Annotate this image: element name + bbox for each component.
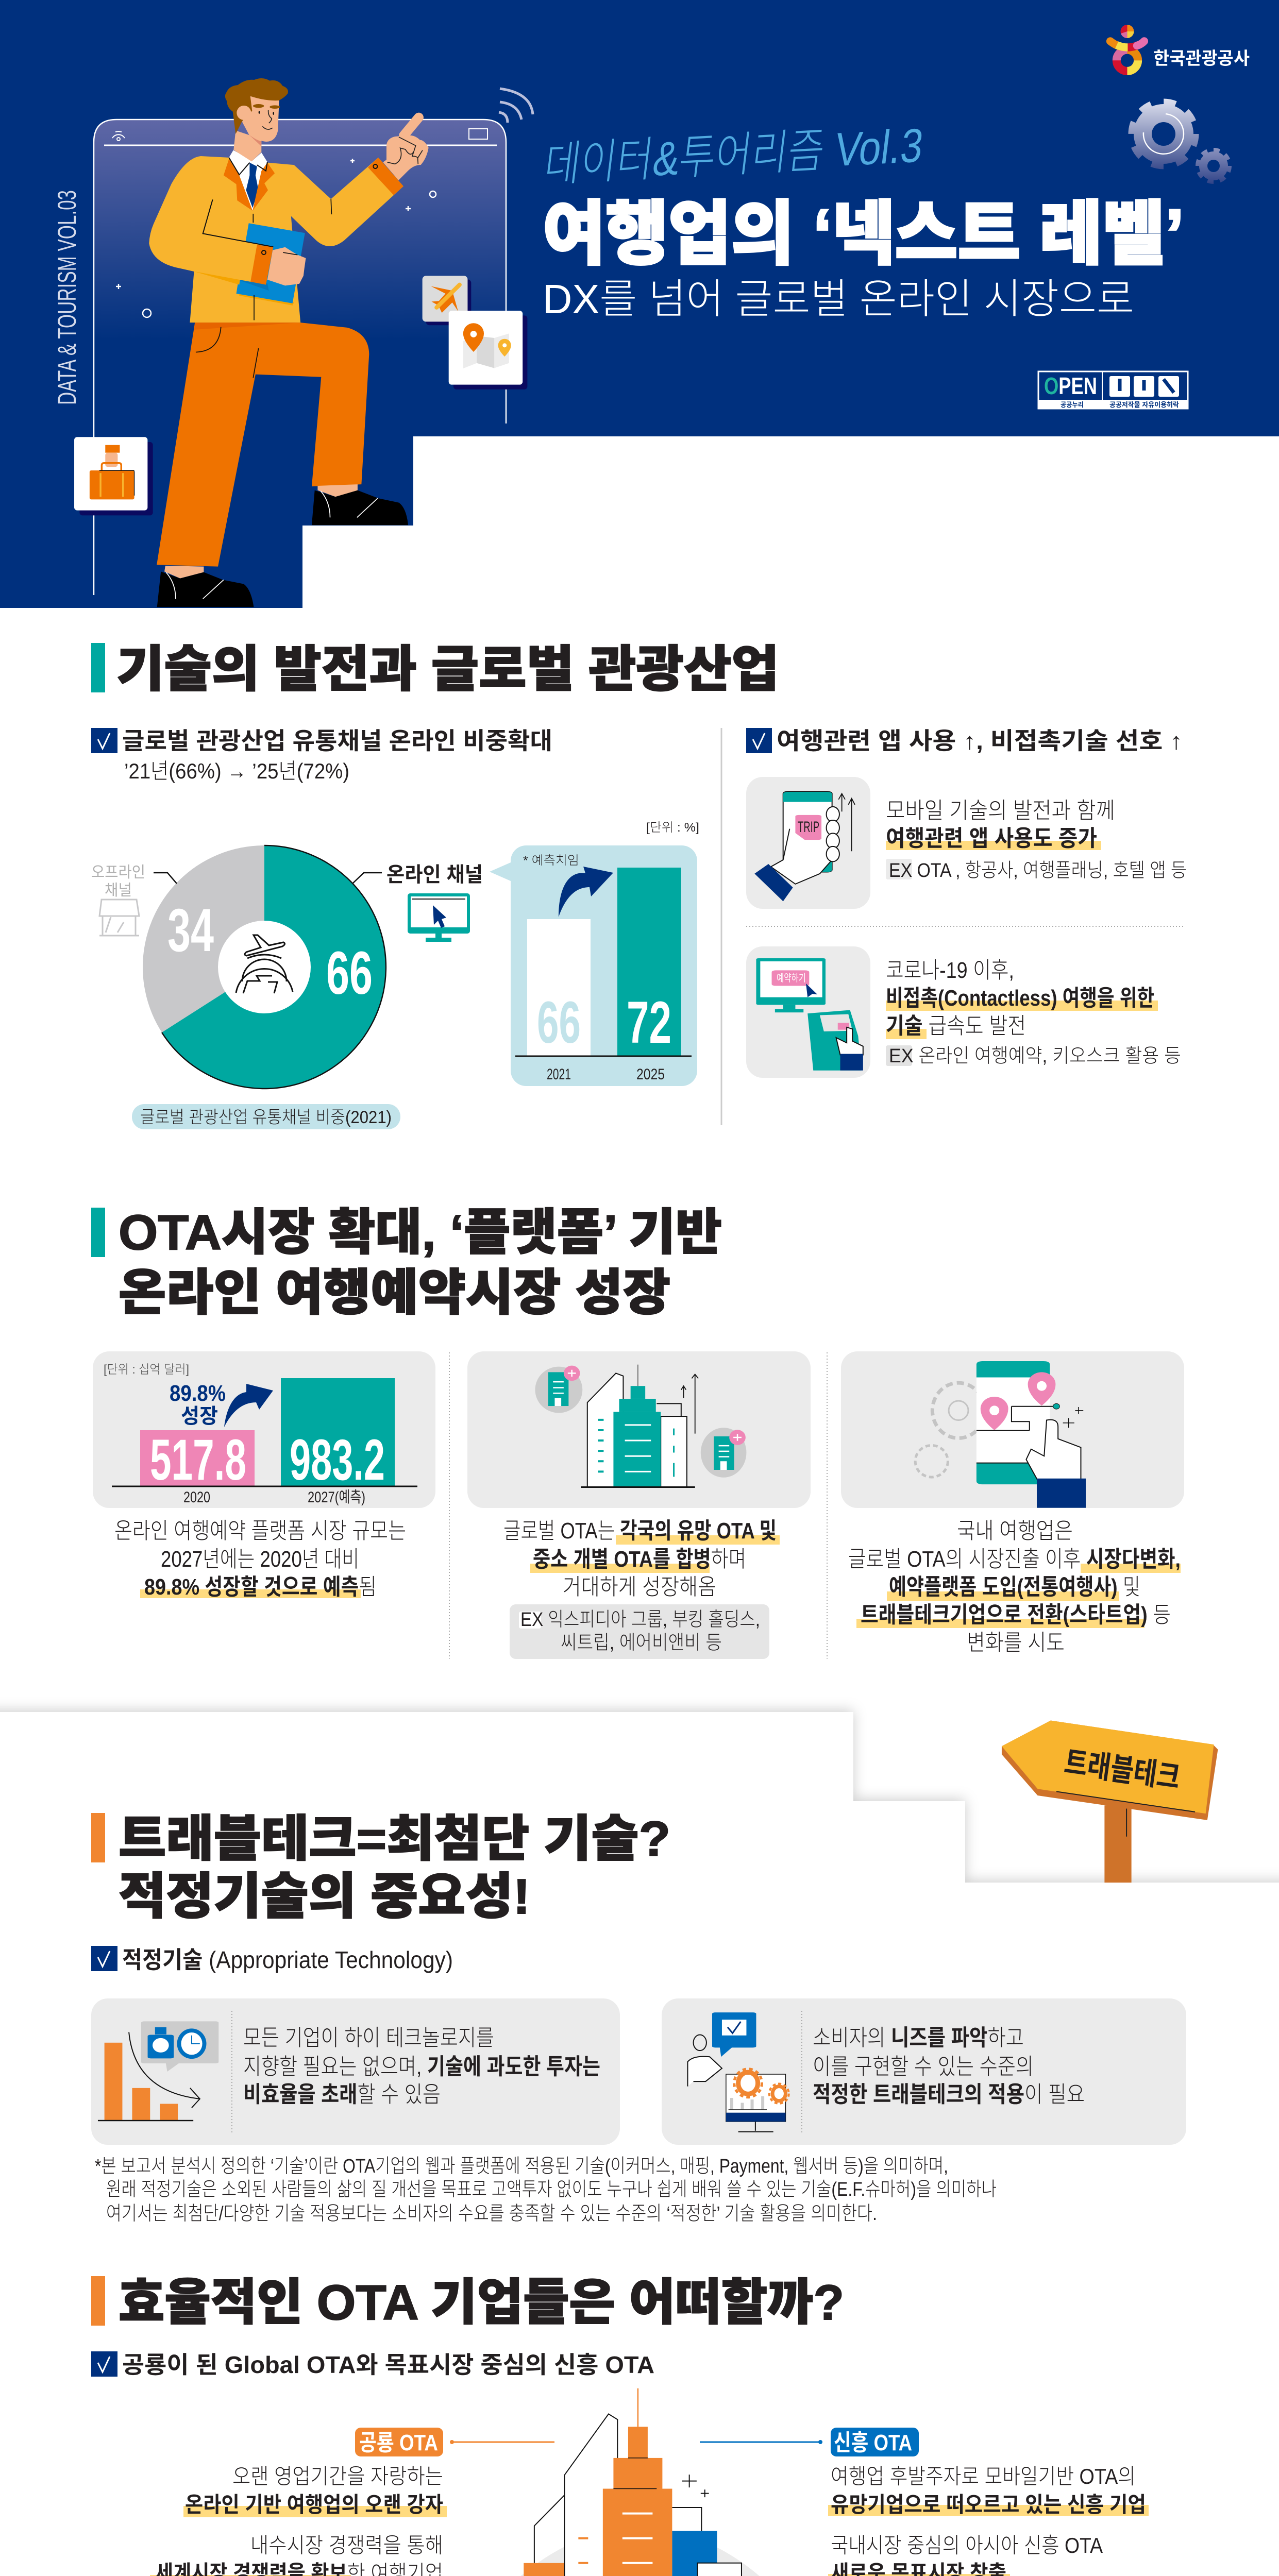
panel: market size chart: [단위 : 십억 달러] <box>104 1363 189 1377</box>
face <box>242 96 279 142</box>
card: appropriate level of travel tech <box>662 1998 1186 2145</box>
card: mobile app use: 여행관련 앱 사용도 증가 <box>886 826 1097 851</box>
pie chart: online channel share: 66 <box>326 939 373 1007</box>
panel text: domestic industry: 예약플랫폼 도입(전통여행사) 및 <box>889 1574 1140 1600</box>
hero panel <box>0 0 1279 608</box>
panel text: domestic industry: 변화를 시도 <box>967 1630 1065 1655</box>
card: appropriate level of travel tech: 이를 구현할 수 있는 수준의 <box>813 2054 1034 2079</box>
map card <box>449 311 527 389</box>
card: contactless travel: 코로나-19 이후, <box>886 958 1014 983</box>
panel: market size chart: 2020 <box>183 1489 210 1506</box>
signpost <box>1002 1721 1218 1883</box>
panel: market size chart <box>93 1351 435 1508</box>
hero navy background <box>0 0 1279 608</box>
panel text: market size: 2027년에는 2020년 대비 <box>161 1547 359 1572</box>
plane card <box>423 276 471 325</box>
heading: 트래블테크=최첨단 기술? <box>119 1811 670 1867</box>
heading <box>91 1811 670 1924</box>
section 1: technology and global tourism <box>91 642 1187 1129</box>
panel text: OTA merging: 글로벌 OTA는 각국의 유망 OTA 및 <box>503 1518 777 1544</box>
logo: Korea Tourism Organization <box>1110 25 1250 71</box>
open license badge <box>1038 371 1188 409</box>
card: contactless travel: 예약하기 <box>777 972 806 984</box>
emerging OTA callout: 여행업 후발주자로 모바일기반 OTA의 <box>831 2464 1136 2488</box>
panel: OTA buildings <box>467 1351 811 1508</box>
section 2: OTA market growth <box>91 1205 1184 1659</box>
arrow: growth <box>559 867 613 917</box>
heading: 효율적인 OTA 기업들은 어떠할까? <box>119 2275 844 2330</box>
panel text: OTA merging: 중소 개별 OTA를 합병하며 <box>533 1547 746 1572</box>
emerging OTA callout: 신흥 OTA <box>834 2430 912 2455</box>
heading: 기술의 발전과 글로벌 관광산업 <box>116 642 779 697</box>
bar chart: online share growth: 72 <box>627 990 671 1056</box>
label: offline channel: 오프라인 <box>91 864 145 881</box>
heading: 온라인 여행예약시장 성장 <box>119 1265 670 1320</box>
card: contactless travel <box>746 946 1181 1078</box>
emerging OTA callout: 유망기업으로 떠오르고 있는 신흥 기업 <box>831 2493 1146 2517</box>
section 3: appropriate technology <box>91 1721 1218 2225</box>
card text: 모든 기업이 하이 테크놀로지를 <box>243 2025 494 2050</box>
panel text: domestic industry: 트래블테크기업으로 전환(스타트업) 등 <box>861 1602 1171 1628</box>
main title: 여행업의 ‘넥스트 레벨’ <box>543 195 1184 273</box>
card: mobile app use: 모바일 기술의 발전과 함께 <box>886 798 1115 823</box>
right check heading: 여행관련 앱 사용 ↑, 비접촉기술 선호 ↑ <box>777 727 1183 754</box>
card: inefficiency of over-investment <box>91 1998 620 2145</box>
label: online channel: 온라인 채널 <box>386 863 483 886</box>
bar chart: online share growth <box>490 821 699 1086</box>
signpost: 트래블테크 <box>1062 1745 1182 1795</box>
example box <box>510 1604 769 1659</box>
panel text: market size: 89.8% 성장할 것으로 예측됨 <box>144 1574 377 1600</box>
icon: store <box>99 900 139 936</box>
panel: market size chart: 89.8% <box>170 1381 226 1406</box>
left check heading <box>91 727 552 783</box>
tablet frame illustration <box>94 89 533 595</box>
footnote <box>95 2156 997 2225</box>
panel text: market size <box>114 1518 406 1600</box>
heading: 적정기술의 중요성! <box>119 1869 530 1924</box>
heading <box>91 1205 722 1320</box>
open license badge: OPEN <box>1044 372 1097 399</box>
panel text: domestic industry <box>848 1518 1181 1655</box>
legacy OTA callout: 오랜 영업기간을 자랑하는 <box>232 2464 443 2488</box>
label: offline channel <box>91 864 177 936</box>
legacy OTA callout: 공룡 OTA <box>359 2430 438 2455</box>
left check heading: ’21년(66%) → ’25년(72%) <box>124 759 349 783</box>
footnote: *본 보고서 분석시 정의한 ‘기술’이란 OTA기업의 웹과 플랫폼에 적용된 기술(이커머스, 매핑, Payment, 웹서버 등)을 의미하며, <box>95 2156 948 2177</box>
panel text: domestic industry: 국내 여행업은 <box>957 1518 1073 1544</box>
panel text: domestic industry: 글로벌 OTA의 시장진출 이후 시장다변화, <box>848 1547 1181 1572</box>
label: offline channel: 채널 <box>105 882 132 899</box>
hero title block <box>542 118 1184 322</box>
subtitle: DX를 넘어 글로벌 온라인 시장으로 <box>543 276 1134 322</box>
pointing hand <box>403 117 419 135</box>
icon: declining bars <box>98 2021 218 2121</box>
icon: monitor <box>408 893 470 934</box>
luggage card <box>74 437 153 515</box>
icon: gears <box>1131 101 1230 182</box>
person illustration <box>74 150 527 607</box>
bar chart: online share growth: 66 <box>537 990 581 1056</box>
card: mobile app use <box>746 777 1187 909</box>
card text <box>886 841 1101 850</box>
card text: 소비자의 니즈를 파악하고 <box>813 2025 1024 2050</box>
neck <box>233 130 261 161</box>
bar chart: online share growth: 2025 <box>636 1066 665 1083</box>
logo: Korea Tourism Organization: 한국관광공사 <box>1153 49 1250 69</box>
legacy OTA callout <box>150 2428 554 2576</box>
icon: consumer needs and monitor <box>687 2012 789 2132</box>
section 3 paper sheet <box>0 1712 1279 2061</box>
card: contactless travel: 기술 급속도 발전 <box>886 1013 1026 1039</box>
bar chart: online share growth: 2021 <box>547 1066 571 1083</box>
text <box>183 2506 447 2517</box>
open license badge: 공공저작물 자유이용허락 <box>1109 401 1179 409</box>
tag <box>831 2428 919 2456</box>
tag <box>355 2428 443 2456</box>
section 4: efficient OTA companies <box>91 2275 1188 2576</box>
arrow: growth <box>224 1384 273 1427</box>
pie chart: online channel share <box>143 845 386 1089</box>
illustration: phone, pins, hand <box>915 1361 1086 1508</box>
vertical series label: DATA & TOURISM VOL.03 <box>53 190 81 405</box>
legacy OTA callout: 내수시장 경쟁력을 통해 <box>250 2533 443 2557</box>
icon: phone with hand <box>754 791 855 901</box>
panel: market size chart: 2027(예측) <box>308 1489 365 1506</box>
bar chart: online share growth: * 예측치임 <box>523 854 579 868</box>
icon: plane over globe <box>236 935 293 993</box>
card: contactless travel: EX 온라인 여행예약, 키오스크 활용 등 <box>889 1045 1181 1067</box>
emerging OTA callout <box>700 2428 1164 2576</box>
panel: market size chart: 983.2 <box>290 1428 385 1492</box>
card text <box>886 1001 1158 1011</box>
check heading: 적정기술 (Appropriate Technology) <box>122 1946 453 1973</box>
footnote: 원래 적정기술은 소외된 사람들의 삶의 질 개선을 목표로 고액투자 없이도 누구나 쉽게 배워 쓸 수 있는 기술(E.F.슈마허)을 의미하나 <box>106 2179 997 2200</box>
panel text: OTA merging: EX 익스피디아 그룹, 부킹 홀딩스, <box>520 1609 760 1631</box>
card: mobile app use: TRIP <box>798 819 819 836</box>
icon: monitor and kiosk <box>756 958 863 1071</box>
panel: market size chart: 성장 <box>181 1405 218 1428</box>
panel: market size chart: 517.8 <box>150 1428 246 1492</box>
label: online channel <box>352 863 483 942</box>
panel: domestic industry <box>841 1351 1184 1508</box>
pill caption: 글로벌 관광산업 유통채널 비중(2021) <box>140 1108 392 1127</box>
check heading: 공룡이 된 Global OTA와 목표시장 중심의 신흥 OTA <box>122 2351 654 2378</box>
card: inefficiency of over-investment: 비효율을 초래할 수 있음 <box>243 2082 441 2107</box>
panel text: OTA merging <box>503 1518 780 1659</box>
pie chart: online channel share: 34 <box>167 896 214 964</box>
open license badge: 공공누리 <box>1061 401 1084 409</box>
heading: OTA시장 확대, ‘플랫폼’ 기반 <box>119 1205 722 1260</box>
illustration: buildings <box>535 1365 746 1487</box>
card: appropriate level of travel tech: 적정한 트래블테크의 적용이 필요 <box>813 2082 1085 2107</box>
illustration: orange and blue towers <box>459 2388 820 2576</box>
hair <box>225 78 288 134</box>
bar chart: online share growth: [단위 : %] <box>646 821 699 835</box>
person head and pointing hand <box>225 78 429 180</box>
panel text: OTA merging: 거대하게 성장해옴 <box>563 1574 716 1600</box>
legacy OTA callout: 온라인 기반 여행업의 오랜 강자 <box>185 2493 443 2517</box>
card: inefficiency of over-investment: 지향할 필요는 없으며, 기술에 과도한 투자는 <box>243 2054 600 2079</box>
text <box>828 2505 1149 2516</box>
panel text: market size: 온라인 여행예약 플랫폼 시장 규모는 <box>114 1518 406 1544</box>
card: contactless travel: 비접촉(Contactless) 여행을 위한 <box>886 986 1154 1011</box>
footnote: 여기서는 최첨단/다양한 기술 적용보다는 소비자의 수요를 충족할 수 있는 수준의 ‘적정한’ 기술 활용을 의미한다. <box>106 2203 877 2225</box>
emerging OTA callout: 국내시장 중심의 아시아 신흥 OTA <box>831 2533 1103 2557</box>
panel text: OTA merging: 씨트립, 에어비앤비 등 <box>561 1632 722 1654</box>
card: mobile app use: EX OTA , 항공사, 여행플래닝, 호텔 앱 등 <box>889 860 1187 882</box>
left check heading: 글로벌 관광산업 유통채널 온라인 비중확대 <box>122 727 552 754</box>
series handwriting title: 데이터&투어리즘 Vol.3 <box>542 118 926 192</box>
